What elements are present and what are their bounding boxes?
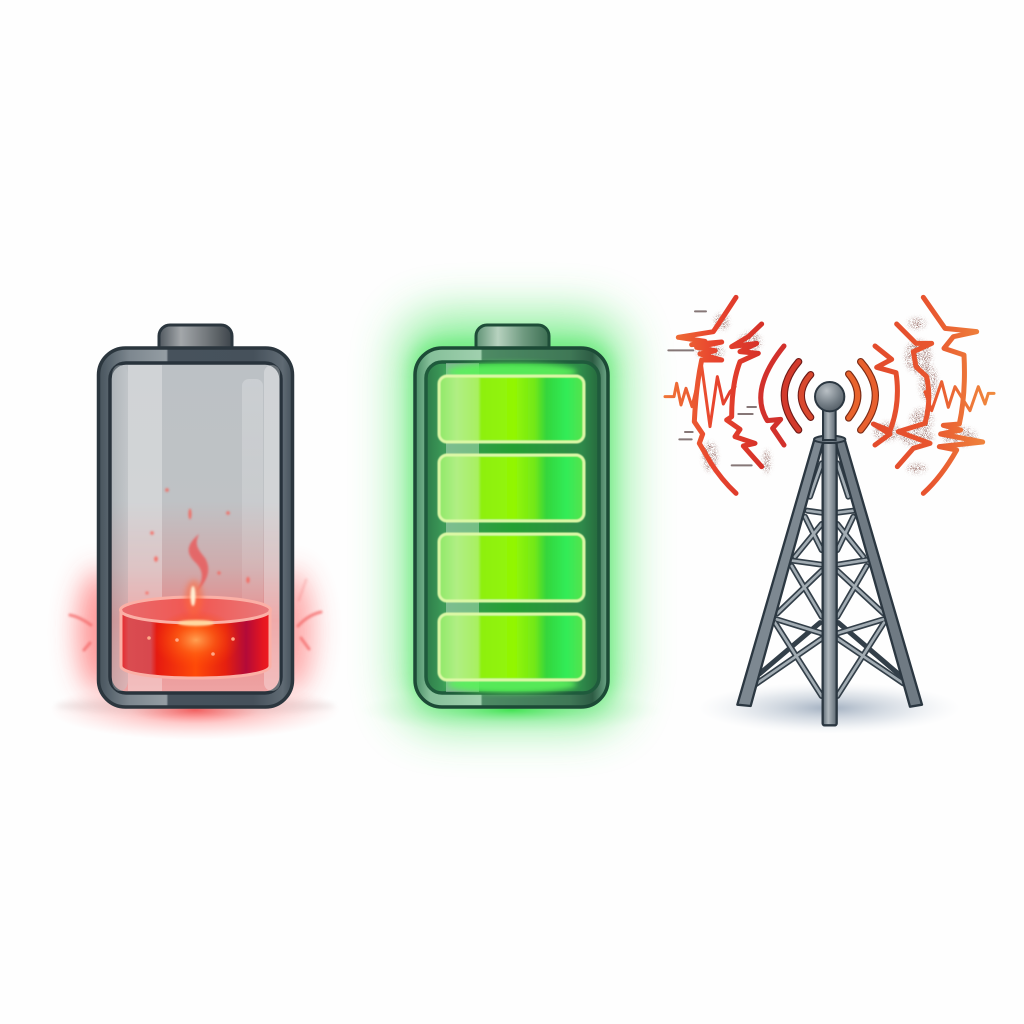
charge cell 4 (439, 614, 584, 680)
lattice tower (737, 382, 922, 725)
liquid sparkles (147, 636, 235, 656)
charge cell 1 (439, 376, 584, 442)
antenna ball (815, 382, 844, 411)
red glow behind battery (50, 570, 340, 740)
side sparks (70, 580, 321, 650)
inner bay (426, 362, 599, 693)
green glow behind battery (361, 315, 661, 734)
glass chamber (110, 363, 281, 693)
rising embers (146, 488, 250, 594)
low battery icon (50, 325, 340, 740)
flame wisp (185, 534, 208, 616)
right waves (873, 297, 994, 493)
radio tower with disrupted signal (665, 297, 994, 734)
mast (823, 407, 836, 440)
signal arc pairs (784, 362, 875, 430)
full battery icon (361, 315, 661, 734)
noise dashes (668, 311, 756, 465)
battery shell (98, 348, 292, 707)
red liquid cell (120, 597, 270, 678)
battery terminal cap (476, 325, 549, 357)
cross bracing highlight (756, 463, 903, 696)
charge cell 3 (439, 534, 584, 601)
signal waves (665, 297, 994, 493)
center leg (823, 443, 837, 725)
left leg (737, 441, 823, 706)
cross bracing outline (756, 463, 903, 696)
right leg (835, 441, 922, 707)
left waves (665, 297, 762, 493)
static noise (697, 314, 977, 473)
charge cell 2 (439, 455, 584, 521)
battery shell (415, 348, 608, 707)
top collar (814, 436, 845, 443)
back bracing (759, 623, 902, 677)
battery terminal cap (159, 325, 232, 357)
tower ground shadow (697, 682, 961, 734)
